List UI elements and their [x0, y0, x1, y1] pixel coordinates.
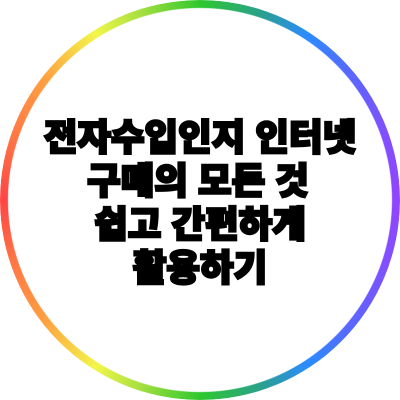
- title line 2: 구매의 모든 것: [87, 160, 309, 202]
- title line 3: 쉽고 간편하게: [94, 204, 306, 245]
- title line 4: 활용하기: [133, 248, 267, 288]
- title line 1: 전자수입인지 인터넷: [44, 117, 356, 158]
